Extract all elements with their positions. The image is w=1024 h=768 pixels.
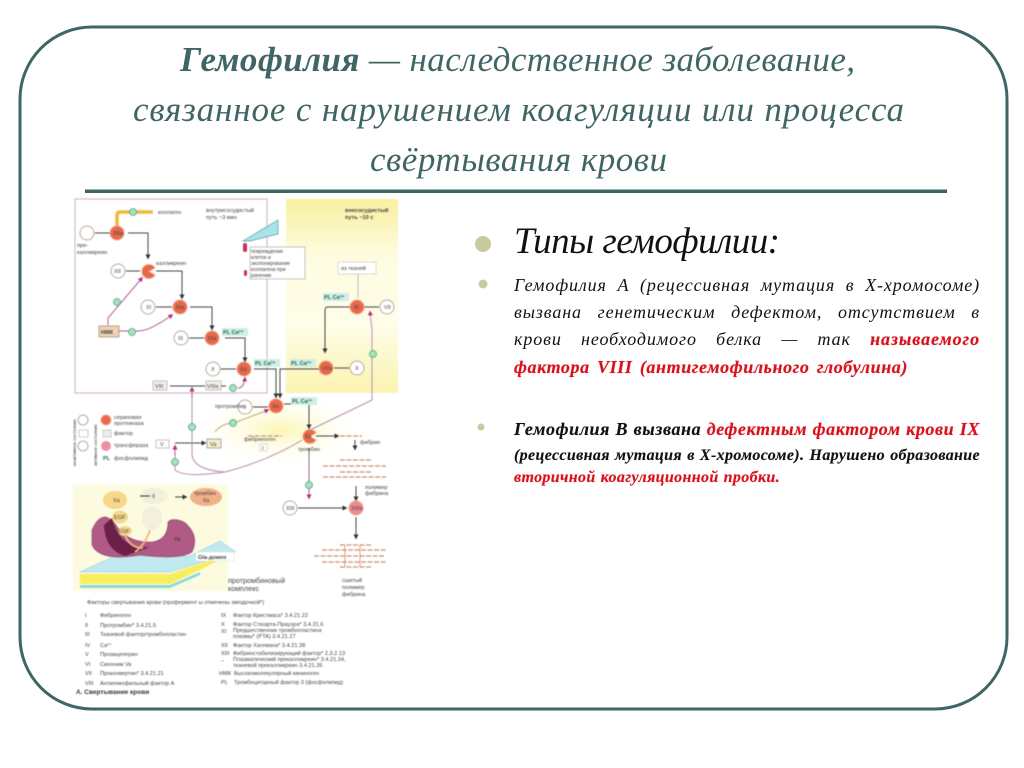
- factor nodes: XIa: [176, 305, 185, 311]
- factor list: PL: [221, 680, 228, 686]
- factor list: [76, 599, 346, 696]
- factor list: Факторы свертывания крови (профермент ы отмечены звездочкой*): [87, 599, 264, 606]
- clot and fibrin labels: фибрин: [360, 440, 380, 446]
- title: свёртывания крови: [370, 140, 667, 179]
- prothrombinase complex illustration: II: [152, 494, 156, 500]
- factor boxes: [99, 326, 221, 448]
- cofactor labels: PL Ca²⁺: [291, 360, 312, 367]
- factor list: Протромбин* 3.4.21.5: [100, 623, 156, 629]
- factor list: Фибринстабилизирующий фактор* 2.3.2.13: [233, 650, 345, 657]
- factor list: Тромбоцитарный фактор 3 (фосфолипид): [234, 679, 343, 686]
- factor list: Плазматический прекалликреин* 3.4.21.34,: [233, 656, 346, 663]
- text block: hemophilia A: крови необходимого белка — так называемого: [514, 329, 980, 349]
- diagram legend: трансфераза: [114, 443, 149, 449]
- factor list: III: [85, 632, 90, 638]
- prothrombinase complex illustration: Va: [174, 537, 181, 543]
- factor list: Фактор Стюарта-Прауэра* 3.4.21.6: [233, 622, 323, 628]
- cofactor labels: PL Ca²⁺: [223, 329, 244, 336]
- factor list: Предшественник тромбопластина: [233, 628, 323, 634]
- clot and fibrin labels: протромбин: [215, 404, 246, 410]
- bullet: hemophilia A: [478, 280, 488, 288]
- title: связанное с нарушением коагуляции или процесса: [133, 90, 904, 129]
- text block: hemophilia B: (рецессивная мутация в Х-хромосоме). Нарушено образование: [514, 447, 980, 464]
- prothrombinase complex illustration: [73, 484, 236, 591]
- pathway labels: коллаген: [158, 210, 181, 216]
- clot and fibrin labels: [215, 404, 389, 598]
- factor nodes: II: [243, 405, 247, 411]
- factor nodes: IIa: [305, 434, 312, 440]
- heading: types of hemophilia: Типы гемофилии:: [514, 221, 780, 262]
- factor boxes: Va: [210, 442, 217, 448]
- pathway labels: [77, 207, 389, 267]
- clot and fibrin labels: тромбин: [298, 447, 320, 453]
- factor nodes: IX: [178, 336, 184, 342]
- factor list: Фактор Хагемана* 3.4.21.38: [233, 643, 305, 649]
- factor list: Фактор Кристмаса* 3.4.21.22: [233, 613, 308, 619]
- black pathway arrows: [95, 233, 379, 538]
- factor nodes: XIII: [286, 506, 295, 512]
- title: [133, 40, 904, 179]
- diagram legend: протеиназа: [114, 421, 145, 427]
- diagram legend: PL: [103, 456, 111, 462]
- factor list: I: [85, 613, 87, 619]
- factor boxes: НМК: [101, 330, 114, 336]
- heading bullet: [475, 236, 491, 252]
- pink feedback arrows: [108, 278, 372, 498]
- wound callout: клеток и: [251, 255, 271, 261]
- text block: hemophilia B: Гемофилия В вызвана дефектным фактором крови IX: [514, 419, 980, 439]
- cofactor labels: PL Ca²⁺: [324, 294, 345, 301]
- factor boxes: V: [160, 442, 164, 448]
- tissue source box: из тканей: [341, 265, 366, 272]
- wound callout: повреждение: [251, 249, 283, 255]
- title: Гемофилия — наследственное заболевание,: [179, 40, 855, 79]
- extrinsic pathway panel: [286, 199, 398, 393]
- text block: hemophilia A: фактора VIII (антигемофильного глобулина): [514, 357, 908, 377]
- pathway labels: внутрисосудистый: [206, 207, 254, 214]
- intrinsic pathway panel: [75, 199, 267, 393]
- factor list: VIII: [85, 681, 94, 687]
- factor list: НМК: [219, 671, 232, 677]
- factor nodes: [80, 226, 394, 515]
- tissue source box: [338, 262, 376, 274]
- prothrombinase complex illustration: тромбин: [194, 491, 216, 497]
- wound callout: ранении: [251, 273, 271, 279]
- clot and fibrin labels: фибриноген: [244, 437, 275, 443]
- clot and fibrin labels: сшитый: [342, 577, 362, 584]
- pathway labels: внесосудистый: [345, 207, 389, 214]
- factor boxes: VIIIa: [207, 384, 219, 390]
- text block: hemophilia B: вторичной коагуляционной пробки.: [514, 469, 780, 486]
- collagen band: [117, 212, 153, 226]
- factor list: –: [221, 658, 225, 664]
- factor list: XII: [221, 643, 228, 649]
- factor list: X: [221, 622, 225, 628]
- coagulation cascade diagram: [72, 199, 398, 696]
- factor list: II: [85, 623, 89, 629]
- clot and fibrin labels: I: [262, 446, 264, 452]
- factor list: А. Свертывание крови: [76, 689, 149, 696]
- wound callout: экспонирование: [251, 261, 290, 267]
- complex caption: [228, 576, 285, 593]
- clot and fibrin labels: фибрина: [342, 592, 366, 598]
- factor nodes: VIIa: [322, 366, 333, 372]
- pathway labels: путь ~10 с: [345, 215, 373, 221]
- factor list: VII: [85, 671, 92, 677]
- factor list: Проакцелерин: [100, 652, 138, 658]
- fibrin strands: [248, 436, 386, 567]
- factor nodes: XIIa: [113, 231, 124, 237]
- bullet: hemophilia B: [478, 424, 484, 430]
- pathway labels: калликреин: [156, 261, 186, 267]
- prothrombinase complex illustration: Gla-домен: [198, 555, 226, 561]
- factor nodes: X: [211, 367, 215, 373]
- pathway labels: пре-: [77, 243, 88, 249]
- factor nodes: XII: [114, 269, 121, 275]
- cofactor labels: [222, 293, 349, 405]
- diagram legend: активное состояние: [93, 424, 98, 466]
- cofactor labels: PL Ca²⁺: [255, 360, 276, 367]
- activator rings: [114, 208, 376, 488]
- factor list: Ca²⁺: [100, 642, 112, 649]
- factor nodes: III: [354, 305, 359, 311]
- factor list: XI: [221, 629, 227, 635]
- factor nodes: XI: [146, 305, 152, 311]
- factor list: Антигемофильный фактор А: [100, 680, 175, 687]
- prothrombinase complex illustration: EGF: [114, 515, 126, 521]
- factor nodes: Xa: [272, 404, 280, 410]
- factor list: IV: [85, 643, 91, 649]
- factor boxes: VIII: [155, 384, 164, 390]
- factor list: IX: [221, 613, 227, 619]
- title divider: [85, 190, 947, 193]
- central glow: [195, 394, 365, 466]
- factor nodes: XIIIa: [351, 506, 363, 512]
- factor list: Тканевой фактор/тромбопластин: [100, 631, 186, 638]
- prothrombinase complex illustration: Xa: [113, 498, 121, 504]
- pathway labels: путь ~3 мин: [206, 215, 237, 221]
- complex caption: комплекс: [228, 584, 259, 593]
- wound wedge icon: [243, 220, 278, 241]
- text block: hemophilia A: вызвана генетическим дефектом, отсутствием в: [514, 302, 980, 322]
- text block: hemophilia A: [514, 275, 980, 378]
- wound callout: [243, 243, 305, 279]
- factor list: тканевой прекалликреин 3.4.21.35: [233, 662, 322, 669]
- diagram legend: фактор: [114, 431, 133, 437]
- text block: hemophilia A: Гемофилия А (рецессивная мутация в Х-хромосоме): [514, 275, 980, 295]
- text block: hemophilia B: [514, 419, 980, 486]
- prothrombinase complex illustration: EGF: [118, 529, 130, 535]
- factor list: Фибриноген: [100, 613, 131, 619]
- pathway labels: калликреин: [77, 250, 107, 256]
- wound callout: коллагена при: [251, 267, 286, 273]
- complex caption: протромбиновый: [228, 576, 285, 585]
- factor list: VI: [85, 662, 91, 668]
- factor nodes: Xa: [240, 367, 248, 373]
- prothrombinase complex illustration: IIa: [203, 498, 210, 504]
- clot and fibrin labels: полимер: [342, 585, 364, 591]
- diagram legend: фосфолипид: [114, 456, 149, 462]
- factor nodes: X: [355, 366, 359, 372]
- factor list: плазмы* (PTA) 3.4.21.27: [233, 634, 296, 640]
- factor list: Синоним Va: [100, 662, 132, 668]
- diagram legend: неактивное состояние: [72, 419, 77, 466]
- factor list: Высокомолекулярный кининоген: [234, 670, 319, 677]
- diagram legend: сериновая: [114, 415, 141, 421]
- diagram legend: [72, 415, 149, 466]
- clot and fibrin labels: полимер: [365, 485, 387, 491]
- cofactor labels: PL Ca²⁺: [292, 398, 313, 405]
- factor nodes: VII: [384, 305, 391, 311]
- factor list: Проконвертин* 3.4.21.21: [100, 671, 164, 677]
- factor list: V: [85, 652, 89, 658]
- factor nodes: IXa: [208, 336, 217, 342]
- clot and fibrin labels: фибрина: [365, 491, 389, 497]
- factor list: XIII: [221, 651, 230, 657]
